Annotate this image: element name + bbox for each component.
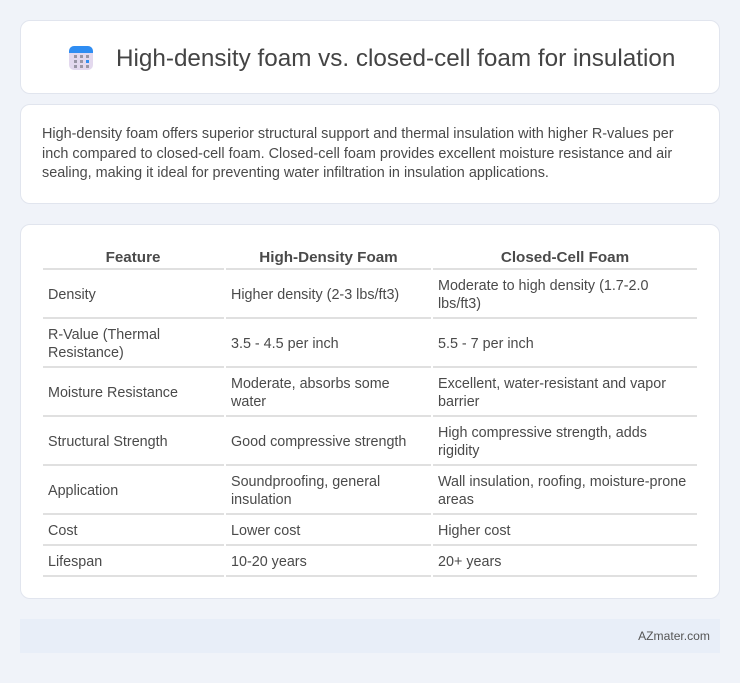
footer text: AZmater.com (638, 629, 710, 643)
row: Lifespan: Lifespan (48, 554, 102, 570)
strength closed-cell value: High compressive strength, adds (438, 425, 647, 441)
r-value closed-cell value: 5.5 - 7 per inch (438, 336, 534, 352)
row: R-Value: Resistance) (48, 345, 124, 361)
row: Moisture Resistance: Moisture Resistance (48, 385, 178, 401)
density closed-cell value (438, 278, 648, 312)
lifespan high-density value: 10-20 years (231, 554, 307, 570)
summary text: inch compared to closed-cell foam. Closed-cell foam provides excellent moisture resistance and air (42, 146, 672, 162)
application high-density value: insulation (231, 492, 292, 508)
header: High-Density Foam: High-Density Foam (259, 249, 398, 266)
row: Cost: Cost (48, 523, 78, 539)
r-value high-density value: 3.5 - 4.5 per inch (231, 336, 339, 352)
moisture closed-cell value: barrier (438, 394, 479, 410)
comparison table panel (20, 224, 720, 599)
row: R-Value: R-Value (Thermal (48, 327, 160, 343)
density closed-cell value: lbs/ft3) (438, 296, 481, 312)
application high-density value: Soundproofing, general (231, 474, 380, 490)
moisture high-density value (231, 376, 390, 410)
summary panel (20, 104, 720, 204)
row: Density: Density (48, 287, 96, 303)
header: Closed-Cell Foam: Closed-Cell Foam (501, 249, 629, 266)
moisture high-density value: water (231, 394, 266, 410)
moisture closed-cell value: Excellent, water-resistant and vapor (438, 376, 666, 392)
application closed-cell value: areas (438, 492, 474, 508)
application closed-cell value (438, 474, 686, 508)
summary text: sealing, making it ideal for preventing water infiltration in insulation applications. (42, 165, 549, 181)
row: Application: Application (48, 483, 118, 499)
application closed-cell value: Wall insulation, roofing, moisture-prone (438, 474, 686, 490)
density high-density value: Higher density (2-3 lbs/ft3) (231, 287, 399, 303)
application high-density value (231, 474, 380, 508)
cost closed-cell value: Higher cost (438, 523, 511, 539)
summary text: High-density foam offers superior structural support and thermal insulation with higher R-values per (42, 126, 674, 142)
moisture closed-cell value (438, 376, 666, 410)
row: Structural Strength: Structural Strength (48, 434, 168, 450)
title panel (20, 20, 720, 94)
summary text (42, 126, 674, 181)
icon: calendar (69, 46, 93, 70)
strength closed-cell value: rigidity (438, 443, 479, 459)
moisture high-density value: Moderate, absorbs some (231, 376, 390, 392)
footer bar (20, 619, 720, 653)
title: High-density foam vs. closed-cell foam for insulation (116, 45, 675, 72)
cost high-density value: Lower cost (231, 523, 300, 539)
strength high-density value: Good compressive strength (231, 434, 406, 450)
strength closed-cell value (438, 425, 647, 459)
header: Feature: Feature (106, 249, 160, 266)
row: R-Value (48, 327, 160, 361)
density closed-cell value: Moderate to high density (1.7-2.0 (438, 278, 648, 294)
lifespan closed-cell value: 20+ years (438, 554, 501, 570)
